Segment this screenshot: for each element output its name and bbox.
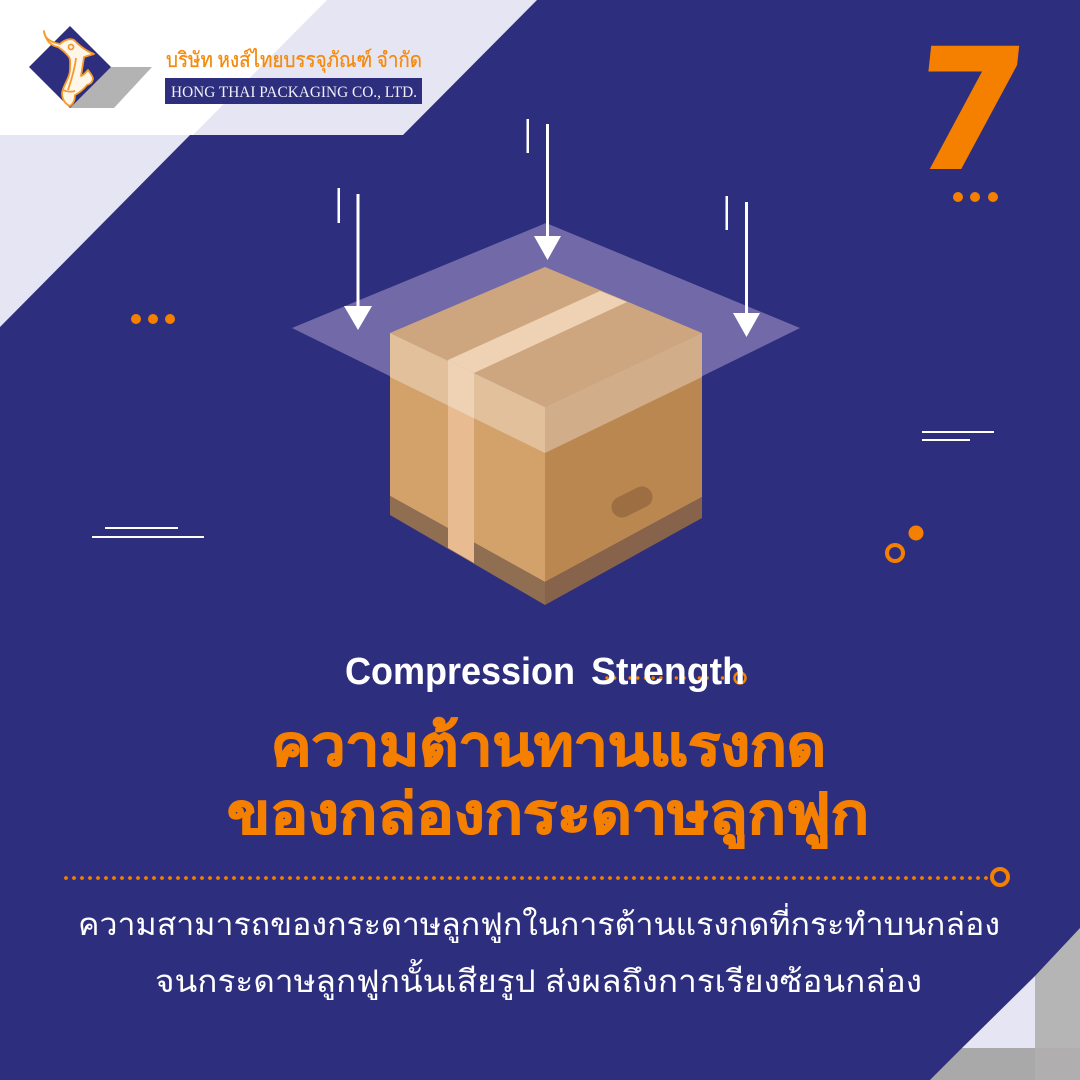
plane overlay on box	[390, 267, 702, 453]
arrow left	[338, 188, 372, 330]
description line 1: ความสามารถของกระดาษลูกฟูกในการต้านแรงกดที่กระทำบนกล่อง	[78, 903, 1000, 943]
translucent pressure plane	[292, 223, 800, 453]
box top face	[390, 267, 702, 407]
lines right	[922, 432, 994, 440]
logo English company name: HONG THAI PACKAGING CO., LTD.	[171, 84, 417, 101]
icon: hamsa bird	[44, 31, 94, 106]
top-left light banner	[0, 0, 537, 327]
dotted divider	[66, 869, 1008, 885]
logo	[29, 26, 422, 108]
tape top	[448, 291, 627, 373]
arrow right	[726, 196, 760, 337]
tape front	[448, 360, 474, 563]
lines left	[92, 528, 204, 537]
logo Thai company name: บริษัท หงส์ไทยบรรจุภัณฑ์ จำกัด	[166, 48, 422, 73]
dots top right	[953, 192, 998, 202]
number 7: 7	[905, 14, 1034, 207]
title word 1: Compression	[345, 651, 575, 693]
arrow middle	[526, 119, 561, 260]
logo diamond	[29, 26, 111, 108]
corner grey top	[1035, 928, 1080, 1048]
box handle	[622, 497, 642, 507]
top-left white logo panel	[0, 0, 327, 135]
dots left	[131, 314, 175, 324]
corrugated box	[390, 267, 702, 605]
heading line 2: ของกล่องกระดาษลูกฟูก	[227, 782, 869, 849]
box bottom strip left	[390, 496, 545, 605]
title word 2: Strength	[591, 651, 745, 693]
dotted accent under title	[607, 672, 746, 684]
box right face	[545, 333, 702, 582]
corner light triangle	[962, 976, 1035, 1048]
logo English name plate	[165, 78, 422, 104]
description	[78, 903, 1000, 1000]
logo shadow shape	[70, 67, 152, 108]
heading line 1: ความต้านทานแรงกด	[271, 714, 826, 777]
circles right	[887, 526, 924, 561]
box left face	[390, 333, 545, 582]
description line 2: จนกระดาษลูกฟูกนั้นเสียรูป ส่งผลถึงการเรียงซ้อนกล่อง	[155, 959, 922, 1000]
box bottom strip right	[545, 497, 702, 605]
corner grey square	[1035, 1048, 1080, 1080]
corner grey bottom	[930, 1048, 1035, 1080]
bottom-right corner decoration	[930, 928, 1080, 1080]
English title	[345, 651, 745, 693]
Thai heading	[227, 714, 869, 849]
